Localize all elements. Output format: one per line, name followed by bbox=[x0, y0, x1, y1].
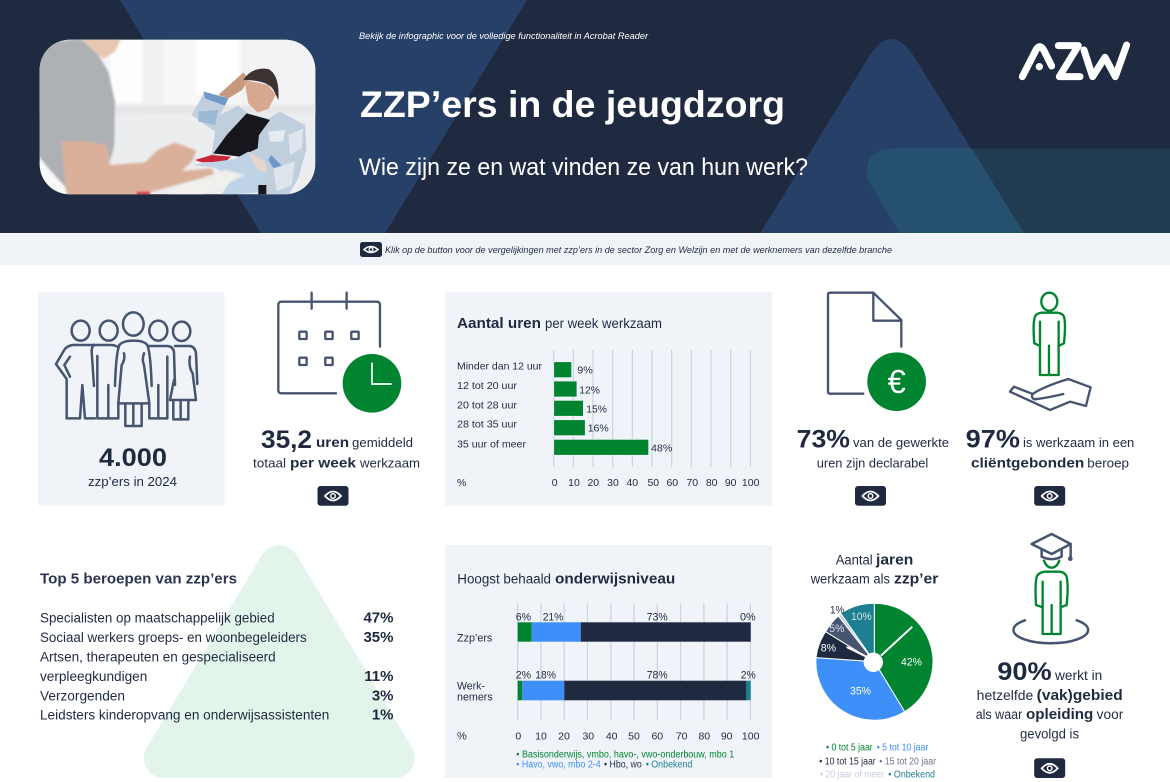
button: eye bbox=[1034, 758, 1065, 778]
bar chart: 16% bbox=[588, 423, 609, 435]
stacked bar chart: Werk- bbox=[457, 680, 485, 692]
stacked bar chart: 73% bbox=[647, 611, 668, 623]
stat: same field as education: opleiding bbox=[1026, 706, 1093, 723]
stat: client-bound occupation: is werkzaam in een bbox=[1023, 435, 1134, 450]
occupation list: Sociaal werkers groeps- en woonbegeleiders bbox=[40, 630, 307, 645]
big number: 4.000 bbox=[99, 444, 167, 472]
stat text: 35,2 bbox=[261, 426, 312, 454]
panel: hours per week chart bbox=[445, 292, 772, 506]
instruction strip bbox=[0, 234, 1170, 265]
stacked bar chart: 10 bbox=[535, 730, 547, 742]
stacked bar chart: Zzp’ers bbox=[457, 633, 493, 645]
stacked bar chart: % bbox=[457, 730, 467, 742]
stat: same field as education: werkt in bbox=[1054, 668, 1102, 683]
bar chart: 20 tot 28 uur bbox=[457, 399, 518, 411]
stat: declarable hours bbox=[797, 293, 949, 506]
stat: declarable hours: € bbox=[888, 363, 906, 400]
heading: Aantal bbox=[836, 552, 873, 567]
chart legend: • Onbekend bbox=[646, 760, 692, 770]
pie legend: • 5 tot 10 jaar bbox=[877, 742, 929, 753]
panel: years active as zzp'er: werkzaam als bbox=[810, 571, 890, 586]
stat: client-bound occupation: cliëntgebonden bbox=[971, 454, 1084, 470]
stacked bar chart: 80 bbox=[698, 730, 710, 742]
occupation list: Leidsters kinderopvang en onderwijsassistenten bbox=[40, 708, 329, 723]
stacked bar chart: 20 bbox=[558, 730, 570, 742]
bar chart: 15% bbox=[586, 403, 607, 415]
stacked bar chart: 0 bbox=[515, 730, 521, 742]
bar chart: 35 uur of meer bbox=[457, 439, 526, 451]
bar chart: 28 tot 35 uur bbox=[457, 419, 518, 431]
stacked bar chart: 21% bbox=[543, 611, 563, 623]
icon: document with euro bbox=[828, 293, 926, 411]
chart legend: • Hbo, wo bbox=[604, 760, 642, 770]
stat: client-bound occupation bbox=[966, 293, 1134, 506]
stat: same field as education: voor bbox=[1097, 707, 1124, 722]
bar chart: 100 bbox=[742, 477, 760, 489]
chart title: Aantal uren bbox=[457, 316, 541, 332]
occupation list: Specialisten op maatschappelijk gebied bbox=[40, 611, 275, 626]
stat: same field as education: hetzelfde bbox=[977, 688, 1033, 703]
logo: AZW bbox=[1022, 45, 1127, 77]
panel: years active as zzp'er: jaren bbox=[875, 552, 913, 568]
bar chart: 70 bbox=[686, 477, 698, 489]
header banner bbox=[0, 0, 1170, 234]
bar chart: 10 bbox=[568, 477, 580, 489]
stat: hours per week: uren bbox=[316, 434, 349, 450]
icon: group of people bbox=[56, 312, 197, 426]
percentages: 11% bbox=[364, 668, 394, 685]
stat: hours per week: totaal bbox=[253, 456, 286, 470]
occupation list: verpleegkundigen bbox=[40, 669, 147, 684]
stat text: 97% bbox=[966, 426, 1020, 454]
bar chart: Minder dan 12 uur bbox=[457, 361, 542, 373]
pie legend: • 20 jaar of meer bbox=[820, 770, 885, 781]
stat: hours per week: werkzaam bbox=[359, 456, 420, 470]
bar chart: 80 bbox=[706, 477, 718, 489]
stat: same field as education: als waar bbox=[976, 707, 1023, 722]
pie legend bbox=[819, 742, 937, 781]
occupation list: Artsen, therapeuten en gespecialiseerd bbox=[40, 649, 276, 664]
pie legend: • 10 tot 15 jaar bbox=[819, 756, 876, 767]
stat: same field as education: gevolgd is bbox=[1020, 726, 1079, 741]
percentages: 1% bbox=[372, 707, 394, 724]
stat: declarable hours: van de gewerkte bbox=[853, 435, 949, 450]
panel: education level chart bbox=[445, 545, 772, 778]
panel: years active as zzp'er bbox=[810, 552, 939, 781]
bar chart: 20 bbox=[587, 477, 599, 489]
icon: graduate on ring bbox=[1013, 534, 1088, 643]
pie legend: • Onbekend bbox=[888, 770, 935, 781]
stat: hours per week: gemiddeld bbox=[352, 435, 413, 450]
panel: education level chart: onderwijsniveau bbox=[555, 571, 675, 587]
pie chart: 42% bbox=[901, 656, 922, 668]
stacked bar chart: 30 bbox=[582, 730, 594, 742]
pie chart bbox=[816, 603, 933, 720]
bar chart: 50 bbox=[647, 477, 659, 489]
panel: hours per week chart: per week werkzaam bbox=[545, 316, 662, 331]
bar chart bbox=[457, 350, 760, 489]
stacked bar chart: 50 bbox=[628, 730, 640, 742]
stacked bar chart: 0% bbox=[740, 611, 756, 623]
bar chart: 30 bbox=[607, 477, 619, 489]
occupation list bbox=[40, 611, 329, 723]
bar chart: 9% bbox=[577, 364, 593, 376]
stacked bar chart: 40 bbox=[606, 730, 618, 742]
label: zzp’ers in 2024 bbox=[88, 474, 177, 489]
stacked bar chart: 60 bbox=[651, 730, 663, 742]
heading: Top 5 beroepen van zzp’ers bbox=[40, 570, 237, 587]
stacked bar chart: 18% bbox=[535, 670, 556, 682]
stacked bar chart: 100 bbox=[742, 730, 760, 742]
stacked bar chart: 2% bbox=[741, 670, 756, 682]
bar chart: 40 bbox=[626, 477, 638, 489]
pie chart: 10% bbox=[851, 611, 872, 623]
bar chart: 0 bbox=[552, 477, 558, 489]
percentages: 35% bbox=[363, 629, 394, 646]
pie chart: 35% bbox=[850, 686, 871, 698]
chart legend: • Basisonderwijs, vmbo, havo-, vwo-onderbouw, mbo 1 bbox=[516, 750, 734, 761]
photo: therapist and young client bbox=[40, 40, 316, 194]
button: eye bbox=[855, 486, 886, 506]
stacked bar chart: 90 bbox=[721, 730, 733, 742]
bar chart: 90 bbox=[725, 477, 737, 489]
pie legend: • 0 tot 5 jaar bbox=[826, 742, 873, 753]
button: eye bbox=[318, 486, 348, 506]
icon: calendar with clock bbox=[278, 293, 401, 413]
stat: declarable hours: uren zijn declarabel bbox=[817, 456, 928, 470]
chart legend bbox=[516, 750, 734, 770]
panel: number of zzp'ers bbox=[38, 292, 224, 506]
intro note: Bekijk de infographic voor de volledige functionaliteit in Acrobat Reader bbox=[359, 31, 649, 42]
instruction strip: Klik op de button voor de vergelijkingen met zzp’ers in de sector Zorg en Welzijn en met de werknemers van dezelfde branche bbox=[385, 245, 892, 256]
chart legend: • Havo, vwo, mbo 2-4 bbox=[516, 760, 601, 770]
stat text: 73% bbox=[797, 426, 850, 454]
panel: years active as zzp'er: zzp’er bbox=[894, 571, 939, 587]
stacked bar chart bbox=[457, 603, 760, 742]
bar chart: 12 tot 20 uur bbox=[457, 380, 518, 392]
pie chart: 8% bbox=[821, 642, 836, 654]
bar chart: 12% bbox=[579, 384, 600, 396]
icon: person above hand bbox=[1010, 293, 1091, 410]
bar chart: 48% bbox=[651, 443, 672, 455]
panel: top 5 occupations bbox=[40, 565, 395, 758]
occupation list: Verzorgenden bbox=[40, 688, 125, 703]
percentages bbox=[363, 610, 394, 724]
stat: hours per week bbox=[253, 293, 420, 506]
bar chart: % bbox=[457, 477, 466, 489]
stacked bar chart: 6% bbox=[516, 611, 531, 623]
percentages: 3% bbox=[372, 687, 394, 704]
stat: same field as education bbox=[976, 534, 1124, 778]
subtitle: Wie zijn ze en wat vinden ze van hun werk? bbox=[359, 154, 808, 181]
stat: same field as education: (vak)gebied bbox=[1037, 687, 1123, 704]
stat text: 90% bbox=[997, 658, 1052, 686]
pie legend: • 15 tot 20 jaar bbox=[879, 756, 937, 767]
stat: hours per week: per week bbox=[290, 454, 356, 470]
stat: client-bound occupation: beroep bbox=[1087, 456, 1129, 470]
stacked bar chart: nemers bbox=[457, 692, 493, 704]
pie chart: 1% bbox=[830, 604, 845, 616]
title: ZZP’ers in de jeugdzorg bbox=[360, 84, 785, 125]
chart title: Hoogst behaald bbox=[457, 571, 551, 586]
stacked bar chart: 2% bbox=[516, 670, 531, 682]
button: eye bbox=[1034, 486, 1065, 506]
pie chart: 5% bbox=[829, 623, 845, 635]
percentages: 47% bbox=[363, 610, 394, 627]
stacked bar chart: 70 bbox=[676, 730, 688, 742]
bar chart: 60 bbox=[666, 477, 678, 489]
background triangle bbox=[164, 565, 395, 758]
stacked bar chart: 78% bbox=[647, 670, 668, 682]
